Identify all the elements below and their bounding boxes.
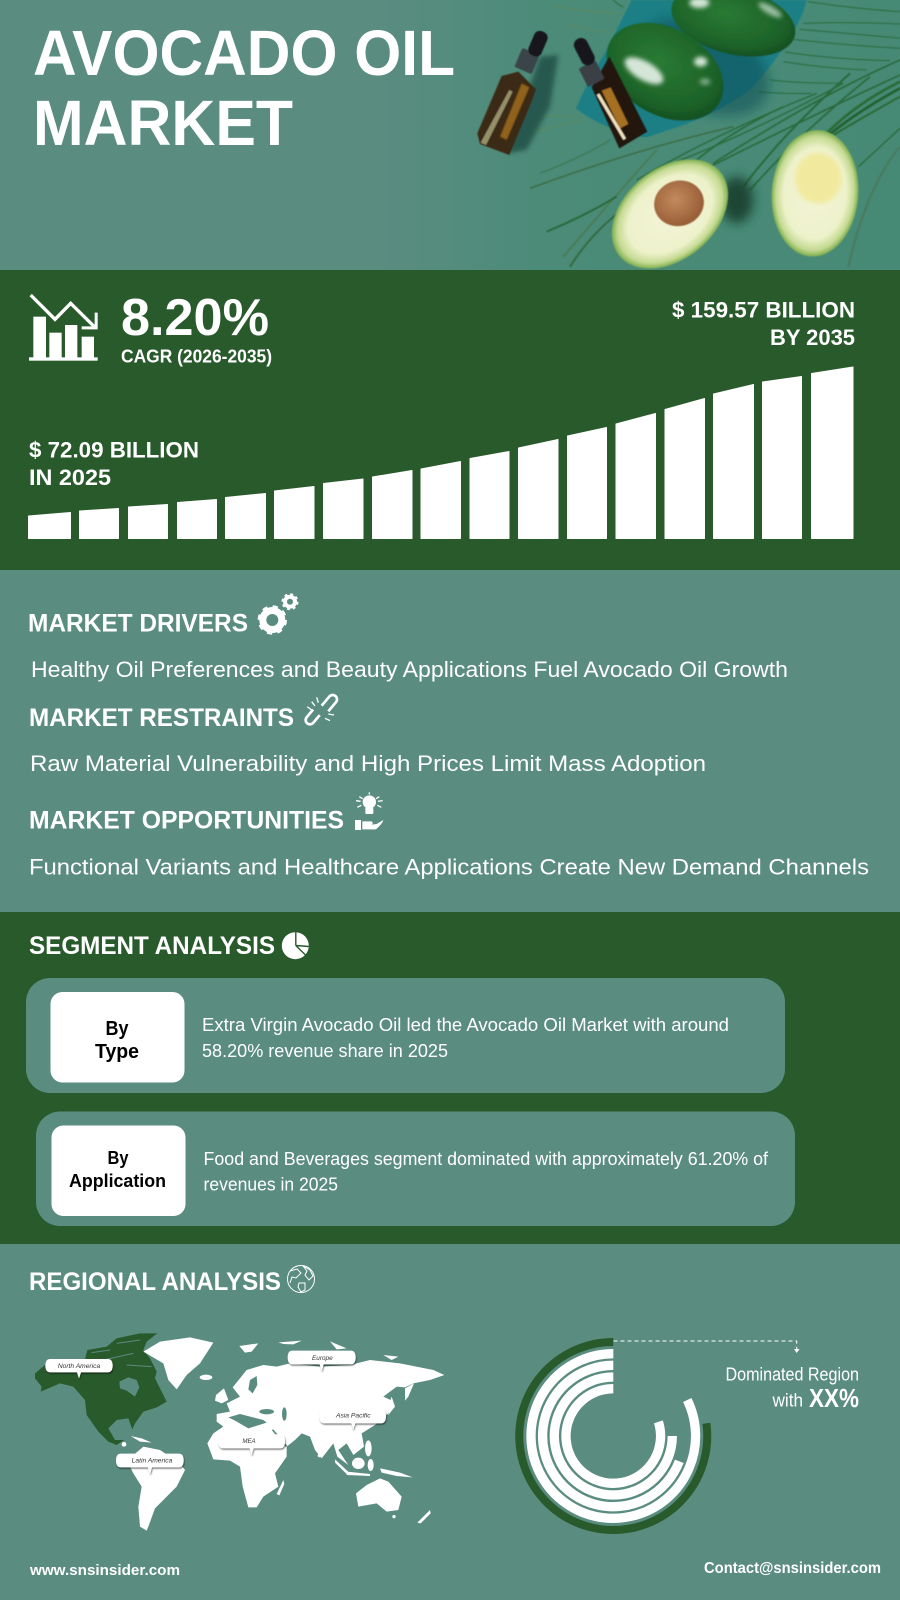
footer: website: www.snsinsider.com [29, 1562, 180, 1579]
leaf bowl [576, 0, 807, 137]
text: by application [204, 1148, 769, 1194]
panel: market dynamics [0, 570, 900, 912]
Arctic straits [92, 1340, 152, 1367]
2025 value: IN 2025 [29, 465, 111, 490]
heading: market drivers: MARKET DRIVERS [28, 610, 248, 638]
CAGR value: CAGR (2026-2035) [121, 346, 272, 366]
text: by type: Extra Virgin Avocado Oil led the Avocado Oil Market with around [202, 1014, 729, 1035]
avocado top [664, 0, 803, 68]
2025 value: $ 72.09 BILLION [29, 438, 199, 462]
text: by type: 58.20% revenue share in 2025 [202, 1040, 448, 1061]
photo: avocados and oil bottles [477, 0, 900, 291]
tag: by type: By [106, 1018, 129, 1040]
tag: by application: By [108, 1147, 129, 1168]
callout: Asia Pacific [319, 1409, 386, 1430]
bowl shadow [622, 0, 785, 136]
bottle right [572, 36, 647, 148]
palm fronds [525, 0, 900, 267]
inland seas [228, 1376, 287, 1447]
world map [35, 1333, 444, 1531]
panel: segment analysis [0, 912, 900, 1244]
2035 value: BY 2035 [770, 325, 855, 350]
heading: REGIONAL ANALYSIS [29, 1268, 281, 1296]
CAGR value: 8.20% [121, 289, 269, 347]
panel: market size [0, 270, 900, 570]
text: dominated region [726, 1364, 859, 1413]
callout: Europe [288, 1351, 356, 1371]
heading: market restraints: MARKET RESTRAINTS [29, 704, 294, 732]
heading: market opportunities: MARKET OPPORTUNITIES [29, 806, 344, 834]
text: dominated region: with [772, 1390, 803, 1410]
footer: contact: Contact@snsinsider.com [704, 1560, 881, 1577]
callout: Latin America: Latin America [132, 1458, 173, 1465]
header background [0, 0, 900, 270]
callout: North America: North America [58, 1363, 101, 1370]
2035 value [672, 298, 855, 350]
callout: Europe: Europe [312, 1355, 333, 1362]
text: drivers: Healthy Oil Preferences and Beauty Applications Fuel Avocado Oil Growth [31, 657, 788, 682]
tag: by application [52, 1126, 186, 1216]
icon: broken link [304, 693, 339, 726]
bottle left [477, 29, 558, 155]
avocado half with pit [591, 137, 749, 291]
callout: MEA [218, 1434, 285, 1455]
avocado highlights [621, 0, 784, 90]
icon: gears [259, 594, 297, 633]
callout: Asia Pacific: Asia Pacific [335, 1413, 372, 1420]
icon: chart with falling arrow [29, 295, 98, 361]
text: by type [202, 1014, 729, 1061]
callout: North America [45, 1359, 113, 1379]
avocado shadow [720, 177, 753, 223]
text: dominated region: XX% [809, 1383, 859, 1413]
avocado middle [589, 3, 741, 141]
text: by application: revenues in 2025 [204, 1174, 338, 1194]
icon: pie chart [282, 932, 309, 959]
avocado half with hollow [767, 127, 863, 260]
title: AVOCADO OIL [33, 17, 455, 89]
text: dominated region: Dominated Region [726, 1364, 859, 1384]
text: opportunities: Functional Variants and Healthcare Applications Create New Demand Channels [29, 854, 869, 880]
callout: Latin America [116, 1454, 184, 1474]
Hudson Bay [119, 1377, 139, 1397]
text: by application: Food and Beverages segment dominated with approximately 61.20% of [204, 1148, 769, 1169]
2035 value: $ 159.57 BILLION [672, 298, 855, 322]
other continents [122, 1337, 444, 1531]
heading: SEGMENT ANALYSIS [29, 932, 275, 960]
region: North America [35, 1333, 167, 1445]
icon: bulb on hand [355, 792, 383, 830]
title [33, 17, 455, 159]
text: restraints: Raw Material Vulnerability and High Prices Limit Mass Adoption [30, 751, 706, 776]
dashed leader arrow [614, 1341, 800, 1353]
icon: globe [288, 1266, 314, 1292]
callout: MEA: MEA [242, 1438, 256, 1445]
title: MARKET [33, 87, 293, 159]
radial bar chart [519, 1342, 707, 1530]
2025 value [29, 438, 199, 490]
card: by type [26, 978, 785, 1093]
tag: by type [50, 992, 184, 1082]
panel: regional analysis [0, 1244, 900, 1600]
card: by application [36, 1112, 795, 1226]
bar chart [28, 367, 853, 538]
tag: by application: Application [69, 1170, 166, 1191]
tag: by type: Type [95, 1041, 139, 1063]
